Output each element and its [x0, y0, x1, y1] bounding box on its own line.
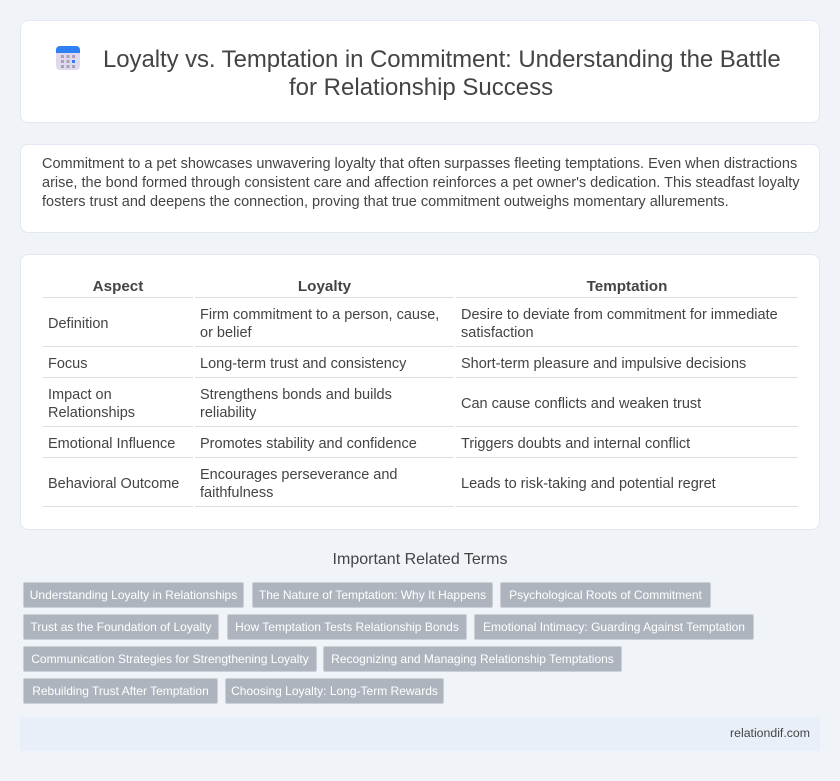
tag [474, 614, 754, 640]
row: emotional influence: Emotional Influence [48, 436, 175, 452]
row: definition: or belief [200, 325, 252, 341]
panel: comparison table [20, 254, 820, 530]
title: Loyalty vs. Temptation in Commitment: Understanding the Battle [103, 46, 781, 73]
tags: related terms [23, 582, 754, 704]
tag [23, 678, 218, 704]
row: behavioral outcome: Leads to risk-taking and potential regret [461, 476, 716, 492]
tag: Understanding Loyalty in Relationships [30, 588, 237, 602]
row: focus: Long-term trust and consistency [200, 356, 406, 372]
row: behavioral outcome: Behavioral Outcome [48, 476, 179, 492]
tag [323, 646, 622, 672]
row: definition: Firm commitment to a person, cause, [200, 307, 439, 323]
tag [227, 614, 467, 640]
heading: related terms: Important Related Terms [333, 551, 507, 568]
row: definition: Desire to deviate from commitment for immediate [461, 307, 778, 323]
panel: intro text [20, 144, 820, 233]
row: impact: Strengthens bonds and builds [200, 387, 392, 403]
row: definition [48, 307, 778, 341]
row: impact: reliability [200, 405, 256, 421]
tag [23, 582, 244, 608]
row: focus [48, 356, 746, 372]
intro paragraph: arise, the bond formed through consistent care and affection reinforces a pet owner's dedication. This steadfast loyalty [42, 175, 799, 191]
row: impact: Impact on [48, 387, 112, 403]
title: for Relationship Success [289, 74, 553, 101]
row: emotional influence: Promotes stability and confidence [200, 436, 417, 452]
tag: Emotional Intimacy: Guarding Against Temptation [483, 620, 745, 634]
row: definition: Definition [48, 316, 108, 332]
tag: The Nature of Temptation: Why It Happens [259, 588, 486, 602]
row: focus: Short-term pleasure and impulsive decisions [461, 356, 746, 372]
tag: How Temptation Tests Relationship Bonds [235, 620, 459, 634]
title [103, 46, 781, 101]
tag [252, 582, 493, 608]
row: emotional influence [48, 436, 690, 452]
footer bar [20, 717, 820, 751]
tag [225, 678, 444, 704]
row: behavioral outcome: Encourages perseverance and [200, 467, 398, 483]
row: focus: Focus [48, 356, 88, 372]
table header: Loyalty [298, 278, 351, 295]
tag: Communication Strategies for Strengthening Loyalty [31, 652, 309, 666]
table header: Temptation [587, 278, 667, 295]
intro paragraph: fosters trust and deepens the connection, proving that true commitment outweighs momentary allurements. [42, 194, 729, 210]
tag: Choosing Loyalty: Long-Term Rewards [231, 684, 438, 698]
row: behavioral outcome [48, 467, 716, 501]
panel: header [20, 20, 820, 123]
intro paragraph: Commitment to a pet showcases unwavering loyalty that often surpasses fleeting temptations. Even when distractions [42, 156, 797, 172]
row: impact: Can cause conflicts and weaken trust [461, 396, 701, 412]
tag [500, 582, 711, 608]
intro paragraph [42, 156, 800, 210]
row: definition: satisfaction [461, 325, 534, 341]
table header [93, 278, 667, 295]
row: behavioral outcome: faithfulness [200, 485, 273, 501]
tag: Rebuilding Trust After Temptation [32, 684, 209, 698]
tag: Recognizing and Managing Relationship Temptations [331, 652, 614, 666]
row: impact [48, 387, 702, 421]
tag [23, 646, 317, 672]
icon: calendar [56, 46, 80, 70]
footer text: relationdif.com [730, 726, 810, 740]
tag: Psychological Roots of Commitment [509, 588, 702, 602]
tag [23, 614, 219, 640]
row: impact: Relationships [48, 405, 135, 421]
table header: Aspect [93, 278, 143, 295]
row: emotional influence: Triggers doubts and internal conflict [461, 436, 690, 452]
tag: Trust as the Foundation of Loyalty [30, 620, 212, 634]
